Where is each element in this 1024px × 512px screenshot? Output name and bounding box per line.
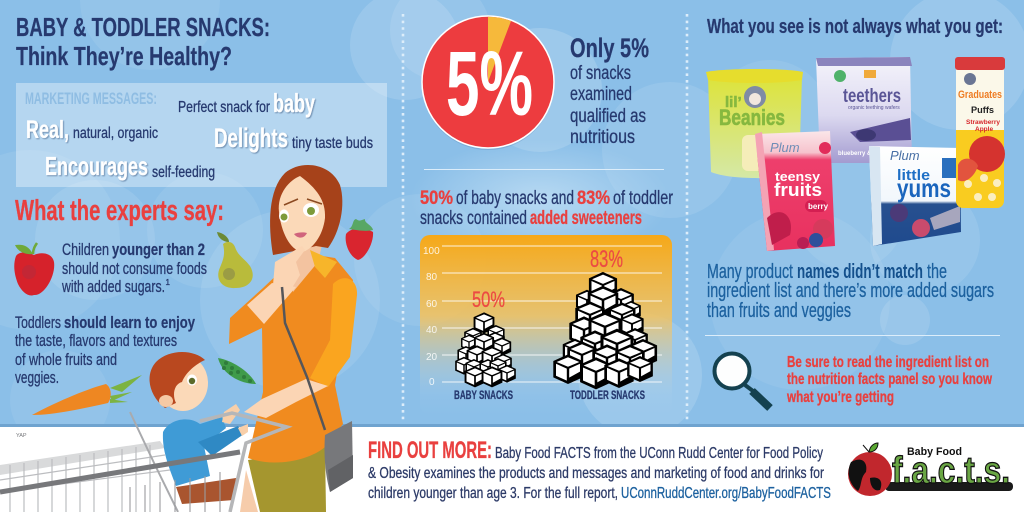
panel: marketing messages	[16, 83, 387, 187]
product: graduates puffs canister: Graduates	[958, 89, 1002, 101]
footer: find out more	[368, 437, 831, 502]
footer: find out more: & Obesity examines the products and messages and marketing of food and drinks for	[368, 465, 825, 482]
panel: marketing messages: Encourages	[45, 151, 148, 181]
chart: added sweeteners: 83%	[590, 246, 623, 273]
panel: marketing messages: natural, organic	[73, 125, 158, 142]
text: only 5 percent	[570, 33, 649, 148]
text: added sweeteners: of toddler	[613, 188, 673, 209]
text: product names: the	[927, 261, 947, 283]
text: added sweeteners: added sweeteners	[530, 208, 642, 229]
icon: peas	[218, 358, 256, 384]
product: teensy fruits box: teensy	[775, 169, 821, 184]
chart: added sweeteners	[420, 235, 672, 415]
footer: find out more: children younger than age 3. For the full report,	[368, 485, 618, 502]
callout: read the ingredient list: what you’re getting	[786, 389, 894, 406]
text: product names: than fruits and veggies	[707, 300, 851, 322]
text: product names: Many product	[707, 261, 793, 283]
product: graduates puffs canister	[955, 57, 1005, 208]
small note: YAP	[16, 433, 27, 439]
product: teethers box: organic teething wafers	[848, 105, 900, 111]
text: toddlers should learn: the taste, flavors and textures	[15, 331, 177, 350]
column dividers	[403, 14, 1000, 420]
chart: added sweeteners: 100	[423, 246, 440, 257]
product: teensy fruits box	[755, 131, 835, 251]
chart: added sweeteners: 60	[426, 299, 438, 310]
text: added sweeteners: of baby snacks and	[456, 188, 574, 209]
footer: find out more: UConnRuddCenter.org/BabyFoodFACTS	[621, 485, 831, 502]
text: children younger than 2	[61, 240, 207, 296]
panel: marketing messages: Real,	[26, 116, 69, 144]
chart: added sweeteners: 20	[426, 352, 438, 363]
product: little yums box: little	[897, 167, 930, 184]
product: teethers box	[816, 57, 912, 163]
product: lil beanies can	[706, 69, 803, 178]
product: lil beanies can: Beanies	[719, 105, 785, 130]
text: children younger than 2: should not consume foods	[62, 259, 207, 278]
text: children younger than 2: Children	[62, 240, 109, 259]
logo: baby food facts	[848, 443, 1013, 496]
text: children younger than 2: younger than 2	[112, 240, 205, 259]
illustration: mother	[229, 165, 357, 512]
title: Think They’re Healthy?	[16, 41, 232, 71]
text: added sweeteners: 83%	[577, 188, 610, 209]
panel: marketing messages: Delights	[214, 123, 288, 153]
text: toddlers should learn: veggies.	[15, 368, 59, 387]
panel: marketing messages: MARKETING MESSAGES:	[25, 89, 157, 108]
product: teensy fruits box: Plum	[770, 140, 800, 155]
illustration: cart front	[0, 413, 287, 512]
product: graduates puffs canister: Puffs	[971, 105, 994, 116]
chart: added sweeteners: TODDLER SNACKS	[570, 390, 645, 402]
text: only 5 percent: examined	[570, 84, 632, 105]
text: added sweeteners	[420, 188, 673, 229]
logo: baby food facts: Baby Food	[907, 446, 962, 458]
footer: find out more: FIND OUT MORE:	[368, 437, 492, 464]
text: only 5 percent: qualified as	[570, 106, 646, 127]
title	[16, 12, 270, 71]
chart: added sweeteners: BABY SNACKS	[454, 390, 513, 402]
heading: what the experts say: What the experts say:	[15, 195, 224, 227]
product: little yums box: Plum	[890, 148, 920, 163]
illustration: child	[150, 352, 248, 504]
panel: marketing messages: tiny taste buds	[292, 135, 373, 152]
pie chart: 5 percent	[422, 16, 554, 150]
product: teethers box: teethers	[843, 86, 901, 107]
product: teensy fruits box: fruits	[774, 180, 822, 200]
product: graduates puffs canister: Apple	[975, 126, 993, 133]
text: toddlers should learn: of whole fruits and	[15, 350, 117, 369]
product: lil beanies can: lil’	[725, 94, 742, 111]
icon: pear	[217, 232, 253, 288]
baby snacks cube pile	[456, 314, 515, 386]
text: only 5 percent: Only 5%	[570, 33, 649, 63]
icon: carrot	[32, 375, 142, 415]
product: graduates puffs canister: Strawberry	[966, 119, 1000, 126]
text: only 5 percent: nutritious	[570, 127, 635, 148]
pie chart: 5 percent: 5%	[446, 33, 533, 135]
icon: magnifying glass	[714, 354, 770, 408]
title: BABY & TODDLER SNACKS:	[16, 12, 270, 42]
illustration: shopping cart back	[0, 412, 178, 512]
product: little yums box: yums	[897, 173, 951, 203]
text: toddlers should learn	[15, 313, 195, 387]
text: product names	[707, 261, 994, 322]
chart: added sweeteners: 50%	[472, 287, 505, 312]
chart: added sweeteners: 0	[429, 377, 435, 388]
text: toddlers should learn: should learn to enjoy	[64, 313, 195, 332]
product: teethers box: blueberry & purple carrot	[838, 151, 910, 157]
chart: added sweeteners: 40	[426, 325, 438, 336]
text: children younger than 2: with added sugars.	[61, 277, 165, 296]
icon: strawberry	[346, 219, 373, 260]
chart: added sweeteners: 80	[426, 272, 438, 283]
footer: find out more: Baby Food FACTS from the UConn Rudd Center for Food Policy	[495, 445, 823, 462]
text: product names: names didn’t match	[797, 261, 923, 283]
panel: marketing messages: baby	[273, 88, 315, 118]
text: added sweeteners: 50%	[420, 188, 453, 209]
text: only 5 percent: of snacks	[570, 63, 631, 84]
callout: read the ingredient list	[786, 354, 993, 406]
product: teensy fruits box: berry	[808, 202, 829, 211]
toddler snacks cube pile	[555, 274, 656, 388]
text: children younger than 2: 1	[166, 278, 170, 287]
panel: marketing messages: self-feeding	[152, 164, 215, 181]
text: added sweeteners: snacks contained	[420, 208, 527, 229]
text: toddlers should learn: Toddlers	[15, 313, 61, 332]
icon: apple	[14, 243, 54, 295]
panel: marketing messages: Perfect snack for	[178, 99, 271, 116]
product: little yums box	[869, 146, 961, 246]
